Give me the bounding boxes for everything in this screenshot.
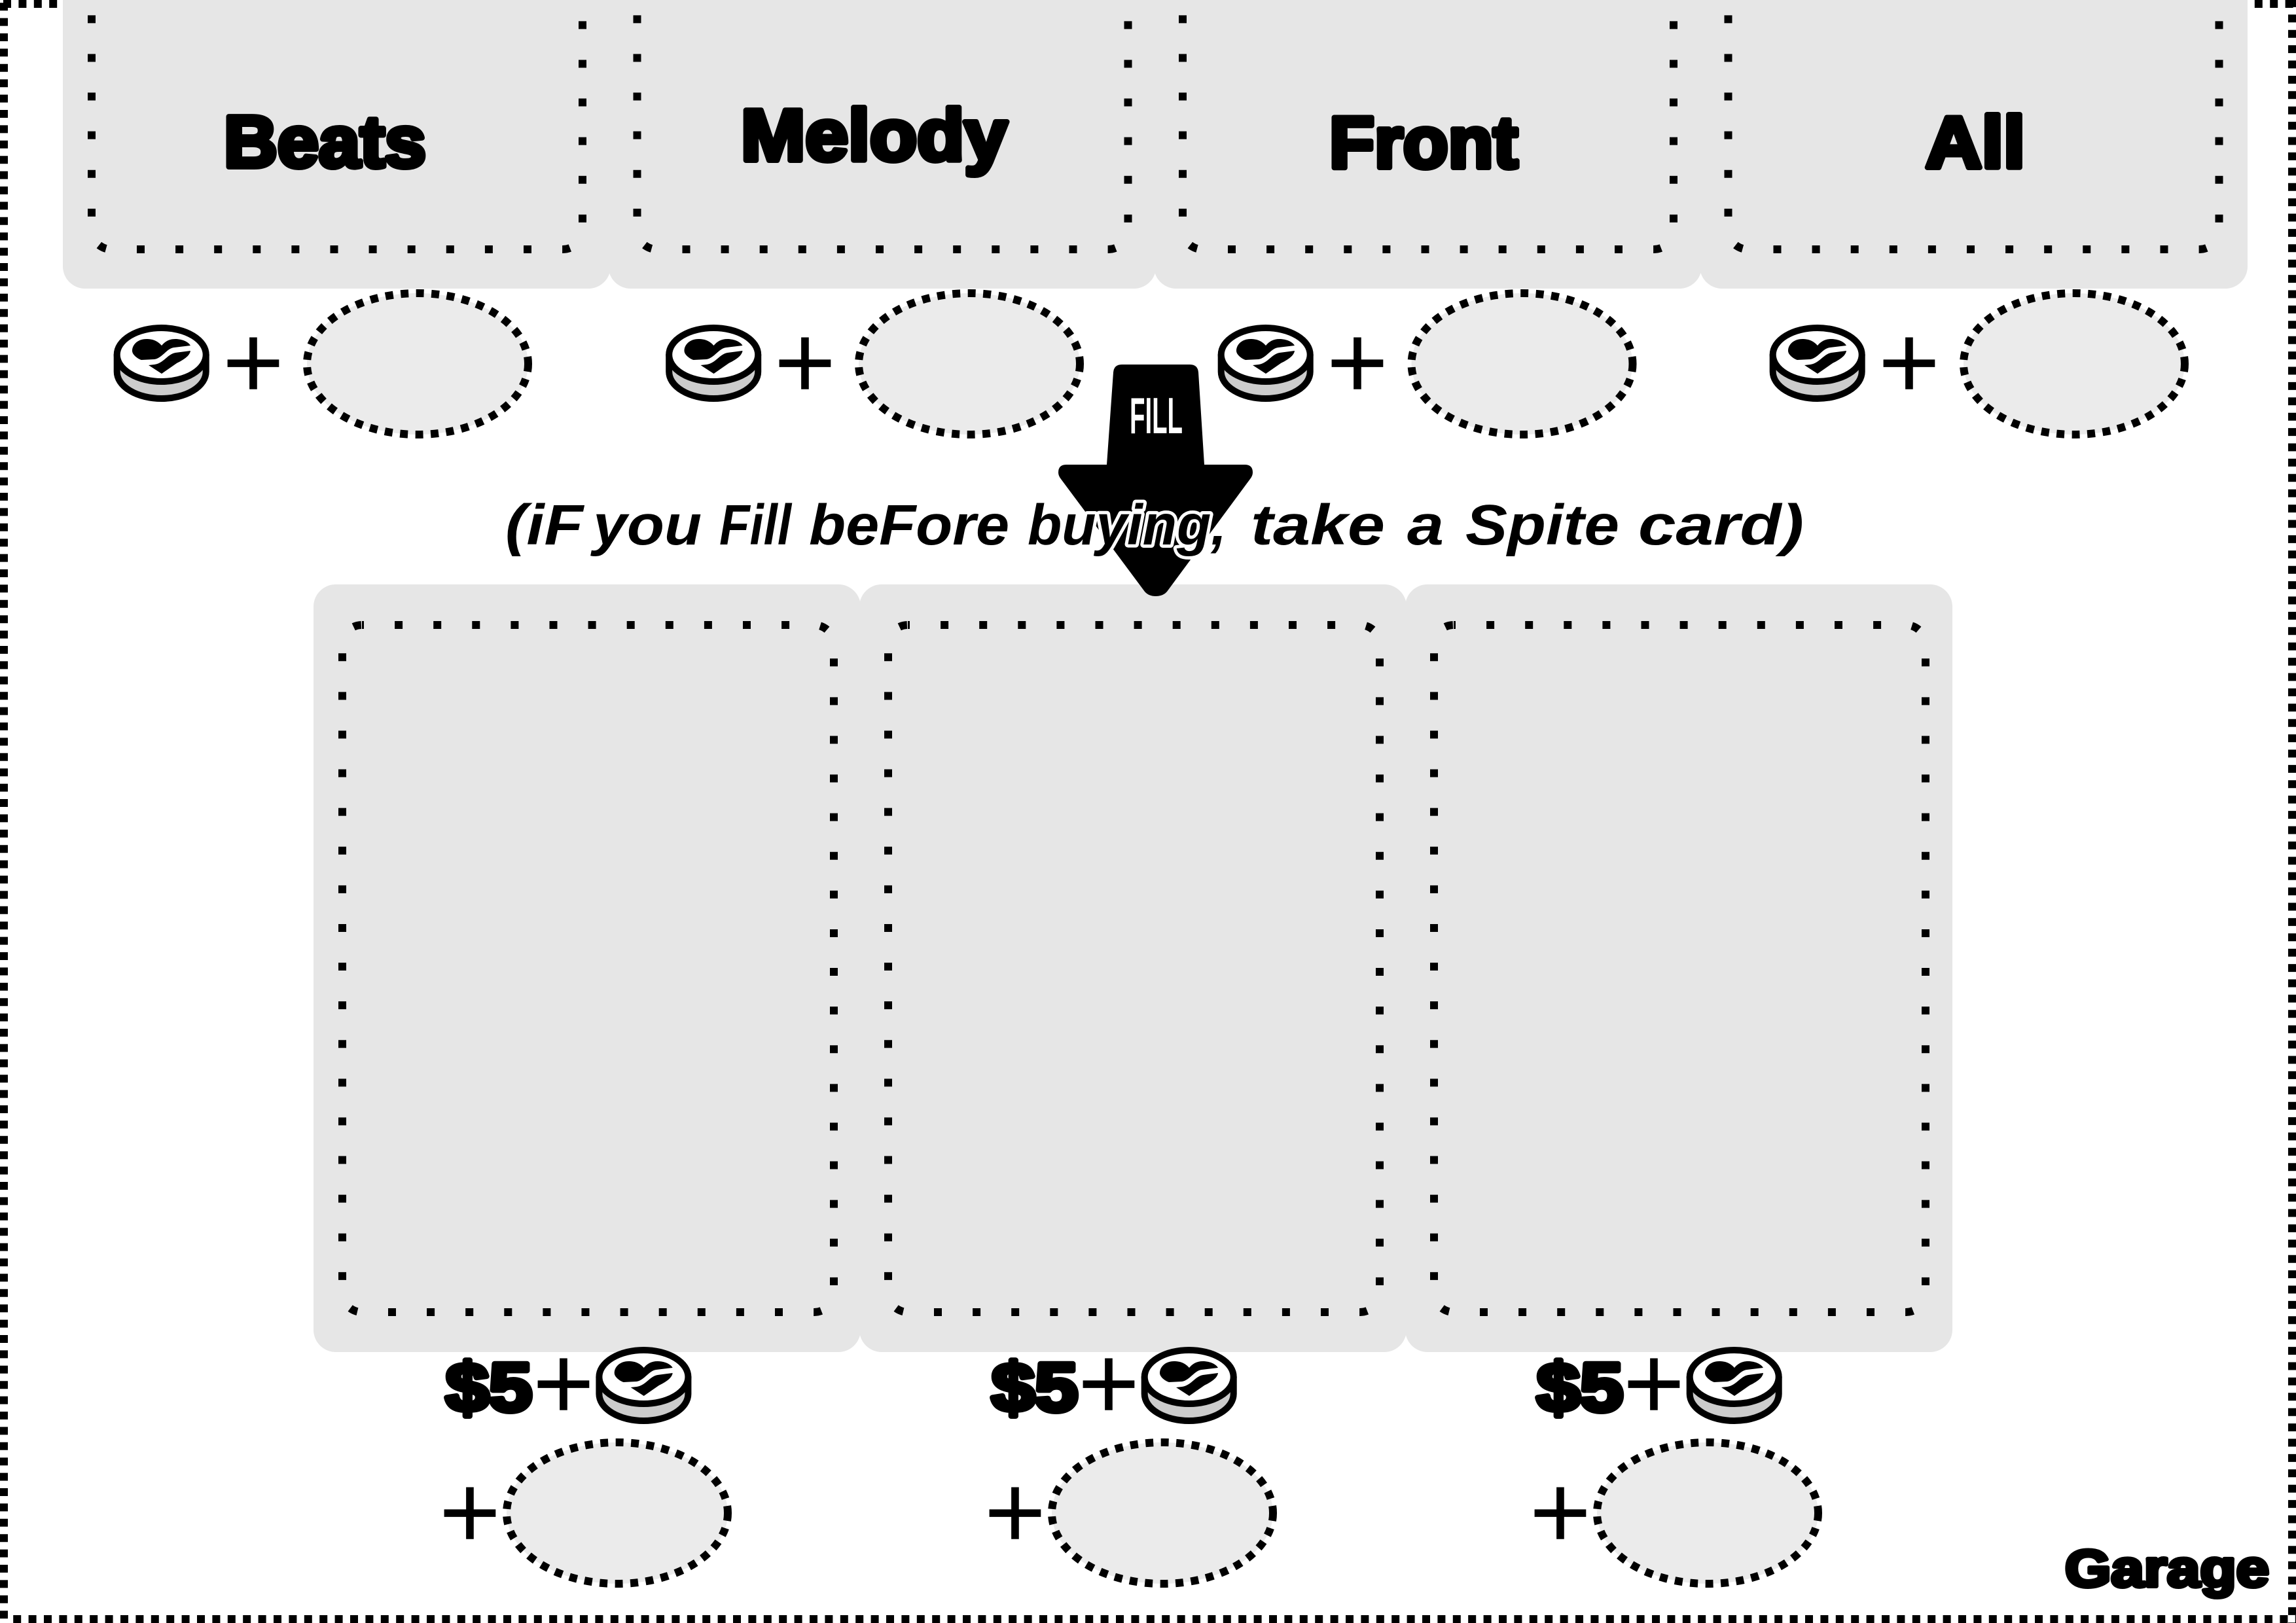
plus row 2 slot 2: +: [984, 1453, 1046, 1571]
panel: market card slot 2: [859, 584, 1407, 1352]
plus 4: +: [1878, 303, 1940, 421]
cost: $5 slot 3: $5: [1537, 1349, 1623, 1426]
heading: Beats: Beats: [224, 101, 426, 183]
panel: market card slot 3: [1405, 584, 1952, 1352]
panel: Beats card slot: [63, 0, 611, 289]
panel: All card slot: [1700, 0, 2248, 289]
plus under slot 3: +: [1623, 1324, 1685, 1442]
panel: Front card slot: [1154, 0, 1702, 289]
instruction text: (iF: [505, 493, 585, 557]
instruction text: Spite: [1465, 493, 1619, 557]
oval under slot 2: [1052, 1442, 1273, 1584]
icon: coin 2: [669, 328, 758, 399]
plus 1: +: [223, 303, 284, 421]
plus under slot 2: +: [1078, 1324, 1139, 1442]
instruction text: buying,: [1028, 493, 1227, 557]
oval slot 4: [1964, 293, 2185, 435]
panel: market card slot 1: [314, 584, 861, 1352]
oval under slot 3: [1597, 1442, 1818, 1584]
heading: All: All: [1926, 102, 2025, 183]
panel: Melody card slot: [609, 0, 1156, 289]
instruction text: a: [1407, 493, 1444, 557]
oval slot 1: [307, 293, 528, 435]
instruction text: beFore: [809, 493, 1009, 557]
plus under slot 1: +: [533, 1324, 594, 1442]
instruction text: you: [590, 493, 702, 557]
icon: coin under slot 1: [599, 1350, 688, 1421]
icon: coin 3: [1221, 328, 1310, 399]
plus row 2 slot 1: +: [439, 1453, 501, 1571]
arrow: fill: [1058, 365, 1253, 596]
location title: Garage: Garage: [2065, 1539, 2269, 1597]
heading: Front: Front: [1329, 102, 1518, 183]
oval slot 2: [859, 293, 1080, 435]
instruction text: [505, 493, 1804, 557]
oval slot 3: [1411, 293, 1632, 435]
plus 2: +: [774, 303, 836, 421]
arrow: fill: FILL: [1130, 387, 1183, 444]
instruction text: take: [1251, 493, 1385, 557]
cost: $5 slot 1: $5: [446, 1349, 532, 1426]
icon: coin 1: [117, 328, 206, 399]
heading: Melody: Melody: [741, 95, 1007, 176]
plus 3: +: [1327, 303, 1388, 421]
icon: coin under slot 2: [1145, 1350, 1234, 1421]
cost: $5 slot 2: $5: [992, 1349, 1078, 1426]
icon: coin under slot 3: [1690, 1350, 1779, 1421]
oval under slot 1: [507, 1442, 728, 1584]
instruction text: Fill: [719, 493, 793, 557]
plus row 2 slot 3: +: [1530, 1453, 1591, 1571]
icon: coin 4: [1773, 328, 1862, 399]
instruction text: card): [1638, 493, 1804, 557]
